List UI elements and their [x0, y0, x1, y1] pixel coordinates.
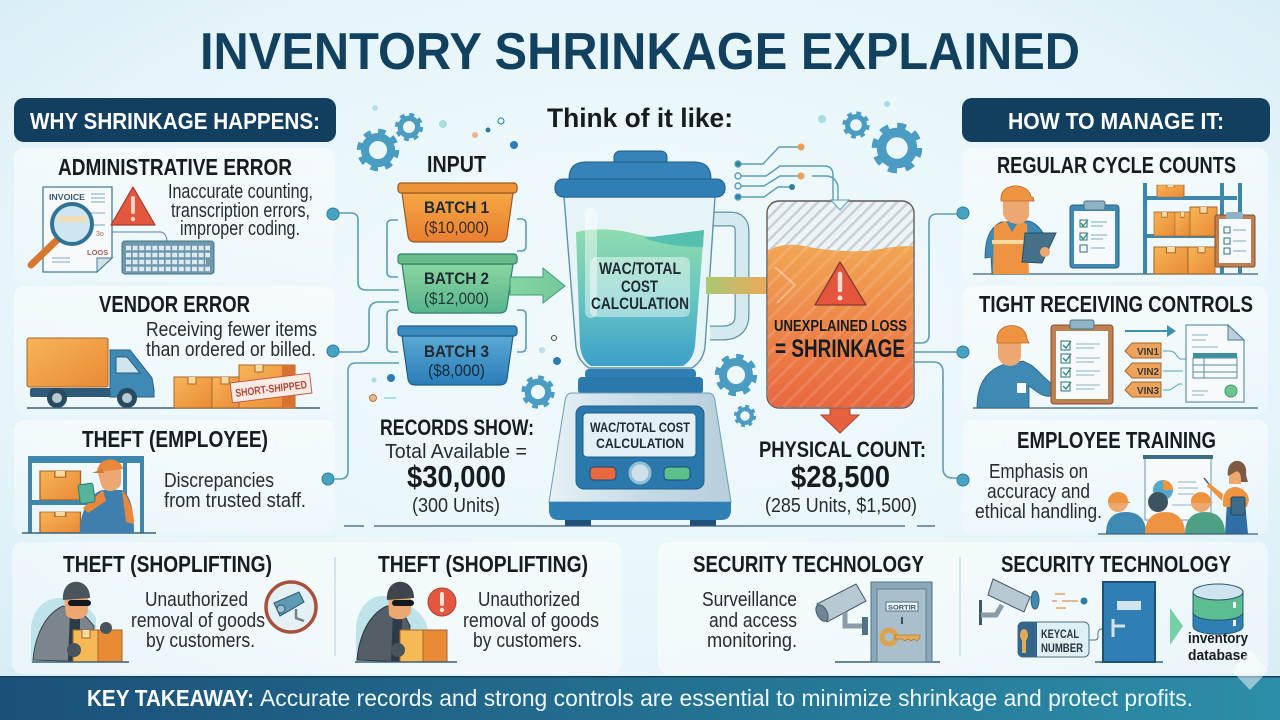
inlet notch: [831, 200, 849, 210]
orange liquid: [768, 245, 913, 407]
description: monitoring.: [707, 630, 797, 652]
connector dot: [957, 474, 969, 486]
description: [146, 319, 317, 361]
connector dot: [322, 473, 334, 485]
blender handle: [710, 219, 742, 333]
description: Emphasis on: [989, 461, 1088, 483]
panel: regular cycle counts: [963, 148, 1268, 282]
heading: THEFT (EMPLOYEE): [82, 426, 268, 452]
lid: [555, 151, 725, 197]
icon: inventory database: database: [1188, 647, 1248, 664]
records show totals: [380, 415, 534, 517]
description: and access: [709, 610, 797, 632]
icon: wall camera: [979, 579, 1088, 625]
base: [549, 393, 731, 502]
VIN tags: VIN3: [1137, 385, 1159, 397]
icon: keycard: KEYCAL: [1041, 627, 1079, 641]
panel: vendor error: [14, 286, 335, 415]
physical count totals: PHYSICAL COUNT:: [759, 437, 926, 462]
records show totals: Total Available =: [385, 441, 527, 463]
icon: shoplifter with box: [31, 582, 129, 662]
connector dot: [327, 345, 339, 357]
panel: shoplifting causes: [12, 542, 621, 674]
icon: checklist clipboard: [1070, 201, 1119, 268]
batch 2 container: ($12,000): [424, 289, 489, 308]
batch 3 container: [398, 326, 517, 385]
description: Discrepancies: [164, 470, 274, 492]
calculation label: WAC/TOTAL: [599, 259, 681, 278]
connector dot: [957, 346, 969, 358]
icon: stocked shelf with clipboard: [1145, 183, 1255, 274]
description: ethical handling.: [975, 501, 1102, 523]
icon: keycard: NUMBER: [1041, 641, 1083, 655]
physical count totals: [759, 437, 926, 517]
jar: [564, 197, 715, 368]
icon: short-shipped boxes: [27, 365, 320, 408]
footer: key takeaway: Accurate records and strong controls are essential to minimize shrinkage and protect profits.: [260, 685, 1193, 711]
batch 3 container: ($8,000): [428, 361, 485, 380]
footer: key takeaway: KEY TAKEAWAY:: [87, 685, 254, 711]
icon: camera sign: [266, 582, 316, 632]
VIN tags: VIN1: [1137, 346, 1159, 358]
right column header: [962, 98, 1270, 142]
heading: ADMINISTRATIVE ERROR: [58, 154, 292, 180]
liquid wave: [644, 230, 704, 247]
description: Surveillance: [702, 589, 797, 611]
description: removal of goods: [131, 610, 265, 632]
warning triangle: [815, 262, 866, 305]
icon: inventory database: inventory: [1188, 630, 1249, 647]
description: [975, 461, 1102, 523]
calculation label: COST: [621, 277, 658, 296]
divider: [959, 557, 961, 656]
gears and dots decoration: [360, 101, 919, 426]
shrinkage label: [774, 318, 907, 363]
VIN tags: [1125, 343, 1186, 397]
description: removal of goods: [463, 610, 599, 632]
heading: THEFT (SHOPLIFTING): [63, 551, 272, 577]
icon: invoice with magnifier: INVOICE: [49, 192, 85, 202]
footer: key takeaway: [0, 676, 1280, 720]
connector lines: shrinkage to controls: [914, 214, 957, 478]
shrinkage tank: [767, 200, 914, 408]
blender: [549, 151, 742, 526]
connector dot: [957, 207, 969, 219]
icon: second shoplifter: [355, 582, 457, 662]
arrow: tank to physical count: [821, 408, 859, 433]
icon: invoice with magnifier: [31, 187, 112, 272]
arrow: batches into blender: [510, 268, 565, 303]
icon: green arrow: [1170, 608, 1183, 645]
left column header: WHY SHRINKAGE HAPPENS:: [30, 108, 320, 134]
batch 2 container: [398, 254, 517, 313]
description: [702, 589, 797, 652]
calculation label: CALCULATION: [591, 294, 689, 313]
description: [463, 589, 599, 652]
description: by customers.: [146, 630, 255, 652]
batch 2 container: BATCH 2: [424, 269, 489, 288]
description: from trusted staff.: [164, 490, 306, 512]
records show totals: RECORDS SHOW:: [380, 415, 534, 440]
base foot: [549, 502, 731, 526]
description: Inaccurate counting,: [168, 181, 313, 203]
heading: SECURITY TECHNOLOGY: [693, 551, 924, 577]
icon: receiving document: [1186, 325, 1244, 402]
records show totals: $30,000: [407, 459, 506, 494]
description: than ordered or billed.: [146, 339, 316, 361]
heading: THEFT (SHOPLIFTING): [378, 551, 588, 577]
description: Unauthorized: [145, 589, 248, 611]
connector dot: [327, 208, 339, 220]
heading: SECURITY TECHNOLOGY: [1001, 551, 1231, 577]
description: [168, 181, 313, 240]
panel: employee training: [963, 420, 1268, 535]
liquid hatching: [768, 245, 913, 407]
description: [164, 470, 306, 512]
glass highlight: [585, 208, 597, 318]
description: by customers.: [473, 630, 582, 652]
icon: worker at shelf: [22, 458, 156, 533]
VIN tags: VIN2: [1137, 366, 1159, 378]
left column header: [14, 98, 336, 142]
connector lines: causes to batches: [334, 213, 526, 479]
calculation label: [590, 257, 690, 317]
circuit lines above tank: [735, 144, 838, 204]
batch 1 container: ($10,000): [424, 218, 489, 237]
centre heading: Think of it like:: [547, 103, 733, 133]
description: improper coding.: [180, 218, 300, 240]
description: [131, 589, 265, 652]
icon: blue door: [1095, 582, 1163, 662]
control panel: WAC/TOTAL COST: [590, 419, 690, 435]
batch 1 container: [398, 183, 517, 242]
icon: warning triangle: [111, 187, 155, 225]
icon: inventory database: [1188, 584, 1249, 664]
shrinkage label: = SHRINKAGE: [775, 335, 905, 363]
control panel: [576, 406, 704, 489]
stamp label: SHORT-SHIPPED: [235, 379, 308, 400]
beam from blender to tank: [706, 277, 768, 294]
panel: tight receiving controls: [963, 286, 1268, 415]
icon: door with camera and key: SORTIR: [888, 604, 916, 612]
sparkle mark: [1232, 650, 1268, 690]
control panel: CALCULATION: [596, 435, 684, 451]
icon: invoice with magnifier: LOOS: [87, 248, 108, 257]
beam chevron: [775, 267, 795, 303]
icon: worker in blue uniform: [973, 326, 1258, 408]
icon: keyboard: [112, 232, 214, 274]
divider: [334, 557, 336, 656]
icon: door with camera and key: [813, 582, 940, 662]
heading: EMPLOYEE TRAINING: [1017, 427, 1216, 453]
batch 1 container: BATCH 1: [424, 198, 489, 217]
description: transcription errors,: [171, 200, 310, 222]
description: accuracy and: [987, 481, 1090, 503]
shrinkage label: UNEXPLAINED LOSS: [774, 318, 907, 335]
panel: security technology: [658, 542, 1268, 674]
liquid: [576, 229, 704, 366]
icon: arrow: [1125, 325, 1176, 337]
records show totals: (300 Units): [412, 495, 500, 517]
heading: VENDOR ERROR: [99, 291, 250, 317]
icon: invoice with magnifier: 3o: [96, 231, 104, 238]
icon: inspection clipboard: [1051, 320, 1113, 404]
ground line: [344, 525, 935, 527]
label: input: INPUT: [427, 151, 486, 177]
physical count totals: $28,500: [791, 459, 890, 494]
handle highlight: [710, 219, 742, 333]
icon: keycard: [1018, 622, 1102, 657]
icon: alert badge: [428, 588, 456, 616]
icon: worker with tablet: [973, 186, 1258, 274]
batch 3 container: BATCH 3: [424, 342, 489, 361]
icon: delivery truck: [27, 338, 154, 408]
panel: employee theft: [14, 420, 335, 535]
icon: training session: [1098, 455, 1258, 534]
title: INVENTORY SHRINKAGE EXPLAINED: [200, 23, 1080, 81]
description: Receiving fewer items: [146, 319, 317, 341]
physical count totals: (285 Units, $1,500): [765, 495, 917, 517]
collar: [578, 369, 703, 394]
description: Unauthorized: [478, 589, 580, 611]
right column header: HOW TO MANAGE IT:: [1008, 108, 1224, 134]
panel: administrative error: [14, 148, 335, 282]
